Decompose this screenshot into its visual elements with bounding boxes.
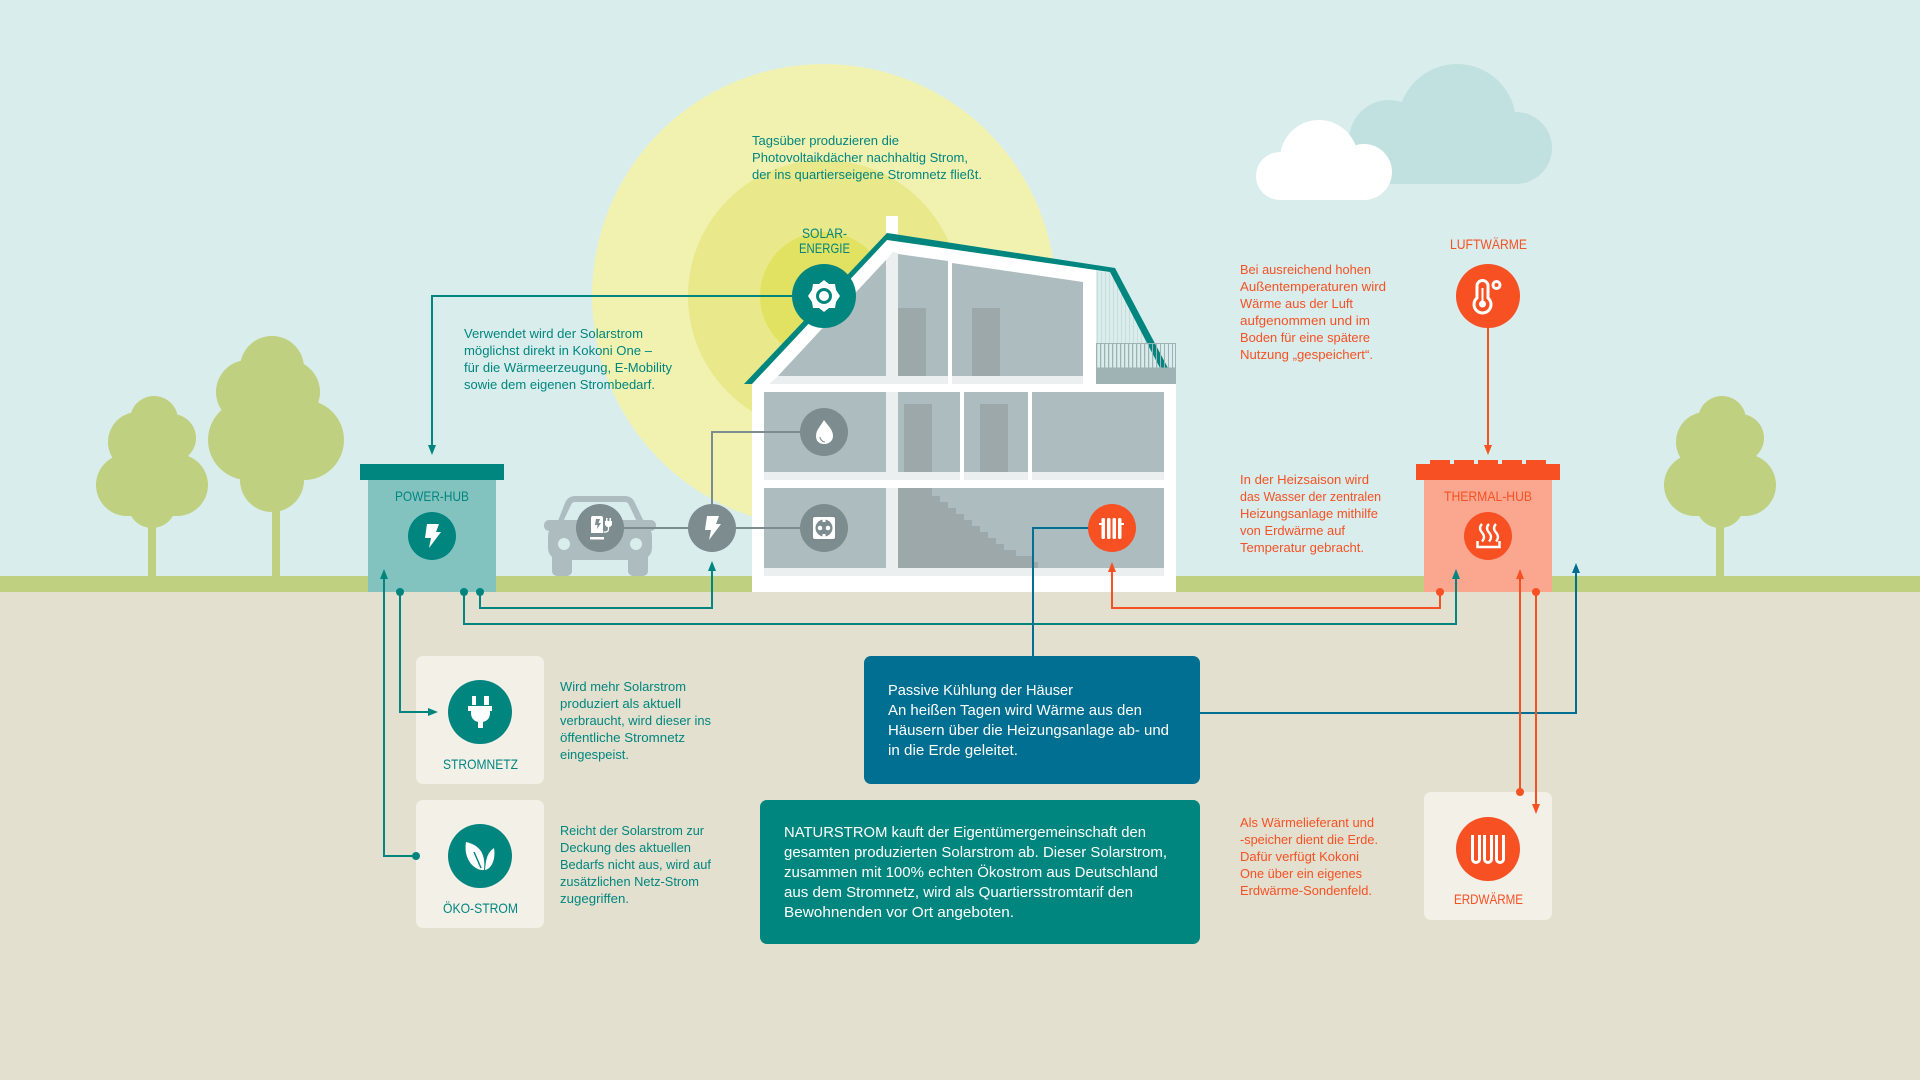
ground [0, 576, 1920, 1080]
connector: cooling from radiator [1033, 528, 1090, 656]
text: green power description: zugegriffen. [560, 891, 629, 906]
text: earth heat description: Als Wärmelieferant und [1240, 815, 1374, 830]
thermal hub label: THERMAL-HUB [1444, 488, 1532, 504]
icon: radiator [1088, 504, 1136, 552]
text: grid feed-in description: öffentliche Stromnetz [560, 730, 685, 745]
text: air heat description: aufgenommen und im [1240, 313, 1370, 328]
text: air heat description: Außentemperaturen wird [1240, 279, 1386, 294]
text: green power description: Reicht der Solarstrom zur [560, 823, 705, 838]
text: grid feed-in description [560, 679, 711, 762]
text: photovoltaic description: Tagsüber produzieren die [752, 133, 899, 148]
text: solar usage description [464, 326, 673, 392]
text: earth heat description: Dafür verfügt Kokoni [1240, 849, 1359, 864]
text: green power description: Deckung des aktuellen [560, 840, 691, 855]
cloud: teal [1349, 64, 1552, 184]
text: photovoltaic description: der ins quartierseigene Stromnetz fließt. [752, 167, 982, 182]
callout: naturstrom: zusammen mit 100% echten Ökostrom aus Deutschland [784, 863, 1158, 881]
top floor rooms [769, 252, 1083, 384]
text: air heat description: Boden für eine spätere [1240, 330, 1370, 345]
callout: naturstrom: aus dem Stromnetz, wird als Quartiersstromtarif den [784, 884, 1133, 901]
callout: passive cooling: Häusern über die Heizungsanlage ab- und [888, 722, 1169, 739]
icon: charging station [576, 504, 624, 552]
text: photovoltaic description [752, 133, 982, 182]
text: green power description: zusätzlichen Netz-Strom [560, 874, 699, 889]
panel: oeko-strom [416, 800, 544, 928]
text: air heat description: Nutzung „gespeichert“. [1240, 347, 1373, 362]
ground floor rooms [764, 488, 1164, 576]
middle floor rooms [764, 392, 1164, 480]
callout: naturstrom: Bewohnenden vor Ort angeboten. [784, 904, 1014, 921]
text: green power description: Bedarfs nicht aus, wird auf [560, 857, 711, 872]
text: grid feed-in description: eingespeist. [560, 747, 629, 762]
text: heating season description: von Erdwärme auf [1240, 523, 1345, 538]
text: solar usage description: Verwendet wird der Solarstrom [464, 326, 643, 341]
icon: earth probes [1456, 817, 1520, 881]
text: photovoltaic description: Photovoltaikdächer nachhaltig Strom, [752, 150, 968, 165]
text: heating season description [1240, 472, 1381, 555]
text: earth heat description [1240, 815, 1378, 898]
callout: naturstrom: NATURSTROM kauft der Eigentümergemeinschaft den [784, 824, 1146, 841]
icon: socket [800, 504, 848, 552]
text: grid feed-in description: verbraucht, wird dieser ins [560, 713, 711, 728]
text: solar usage description: möglichst direkt in Kokoni One – [464, 343, 653, 358]
connector: erdwaerme to thermal hub [1516, 569, 1524, 796]
callout: passive cooling: Passive Kühlung der Häuser [888, 682, 1073, 699]
text: solar-energie label: SOLAR- [802, 225, 847, 241]
sun [592, 64, 1056, 528]
text: heating season description: Heizungsanlage mithilfe [1240, 506, 1378, 521]
connector: thermal hub to radiator [1108, 562, 1444, 608]
text: grid feed-in description: Wird mehr Solarstrom [560, 679, 686, 694]
panel: power hub [360, 464, 504, 592]
icon: water drop [800, 408, 848, 456]
text: solar-energie label [799, 225, 850, 256]
callout: passive cooling: An heißen Tagen wird Wärme aus den [888, 702, 1142, 719]
icon: plug [448, 680, 512, 744]
chimney [886, 216, 898, 240]
connector: solar to power hub [428, 296, 792, 455]
text: earth heat description: Erdwärme-Sondenfeld. [1240, 883, 1372, 898]
panel: thermal hub [1416, 460, 1560, 592]
icon: thermometer [1456, 264, 1520, 328]
connector lines: grey [624, 432, 800, 528]
callout: passive cooling [864, 656, 1200, 784]
text: solar-energie label: ENERGIE [799, 240, 850, 256]
tree: right [1664, 396, 1776, 576]
text: luftwaerme label: LUFTWÄRME [1450, 236, 1527, 252]
house body [752, 240, 1176, 592]
text: earth heat description: -speicher dient die Erde. [1240, 832, 1378, 847]
house [744, 216, 1176, 592]
panel: stromnetz [416, 656, 544, 784]
icon: leaves [448, 824, 512, 888]
icon: heat waves [1464, 512, 1512, 560]
connector: power hub to house [476, 561, 716, 608]
panel: erdwaerme [1424, 792, 1552, 920]
icon: power hub lightning [408, 512, 456, 560]
text: earth heat description: One über ein eigenes [1240, 866, 1362, 881]
callout: naturstrom: gesamten produzierten Solarstrom ab. Dieser Solarstrom, [784, 844, 1167, 861]
text: air heat description [1240, 262, 1386, 362]
text: heating season description: Temperatur gebracht. [1240, 540, 1364, 555]
icon: car [544, 496, 656, 576]
balcony railing [1096, 344, 1176, 384]
text: heating season description: das Wasser der zentralen [1240, 489, 1381, 504]
connector: power hub to stromnetz [396, 588, 438, 716]
balcony glass [1098, 272, 1158, 368]
text: green power description [560, 823, 711, 906]
cloud: white [1256, 120, 1392, 200]
connector: cooling to ground [1200, 563, 1580, 713]
tree: large left [208, 336, 344, 576]
callout: naturstrom [760, 800, 1200, 944]
text: solar usage description: sowie dem eigenen Strombedarf. [464, 377, 655, 392]
tree: small left [96, 396, 208, 576]
roof [744, 233, 1168, 384]
text: heating season description: In der Heizsaison wird [1240, 472, 1369, 487]
text: air heat description: Bei ausreichend hohen [1240, 262, 1371, 277]
icon: solar gear [792, 264, 856, 328]
connector: luftwaerme to thermal hub [1484, 328, 1492, 455]
erdwaerme label: ERDWÄRME [1454, 891, 1523, 907]
text: grid feed-in description: produziert als aktuell [560, 696, 681, 711]
connector: thermal hub to erdwaerme [1532, 588, 1540, 814]
text: solar usage description: für die Wärmeerzeugung, E-Mobility [464, 360, 673, 375]
icon: lightning grey [688, 504, 736, 552]
power hub label: POWER-HUB [395, 488, 469, 504]
text: air heat description: Wärme aus der Luft [1240, 296, 1353, 311]
oeko-strom label: ÖKO-STROM [443, 899, 518, 916]
connector: oeko-strom to power hub [380, 569, 420, 860]
stairs [898, 488, 1038, 568]
callout: passive cooling: in die Erde geleitet. [888, 742, 1018, 759]
connector: power hub to thermal hub [460, 569, 1460, 624]
stromnetz label: STROMNETZ [443, 756, 518, 772]
